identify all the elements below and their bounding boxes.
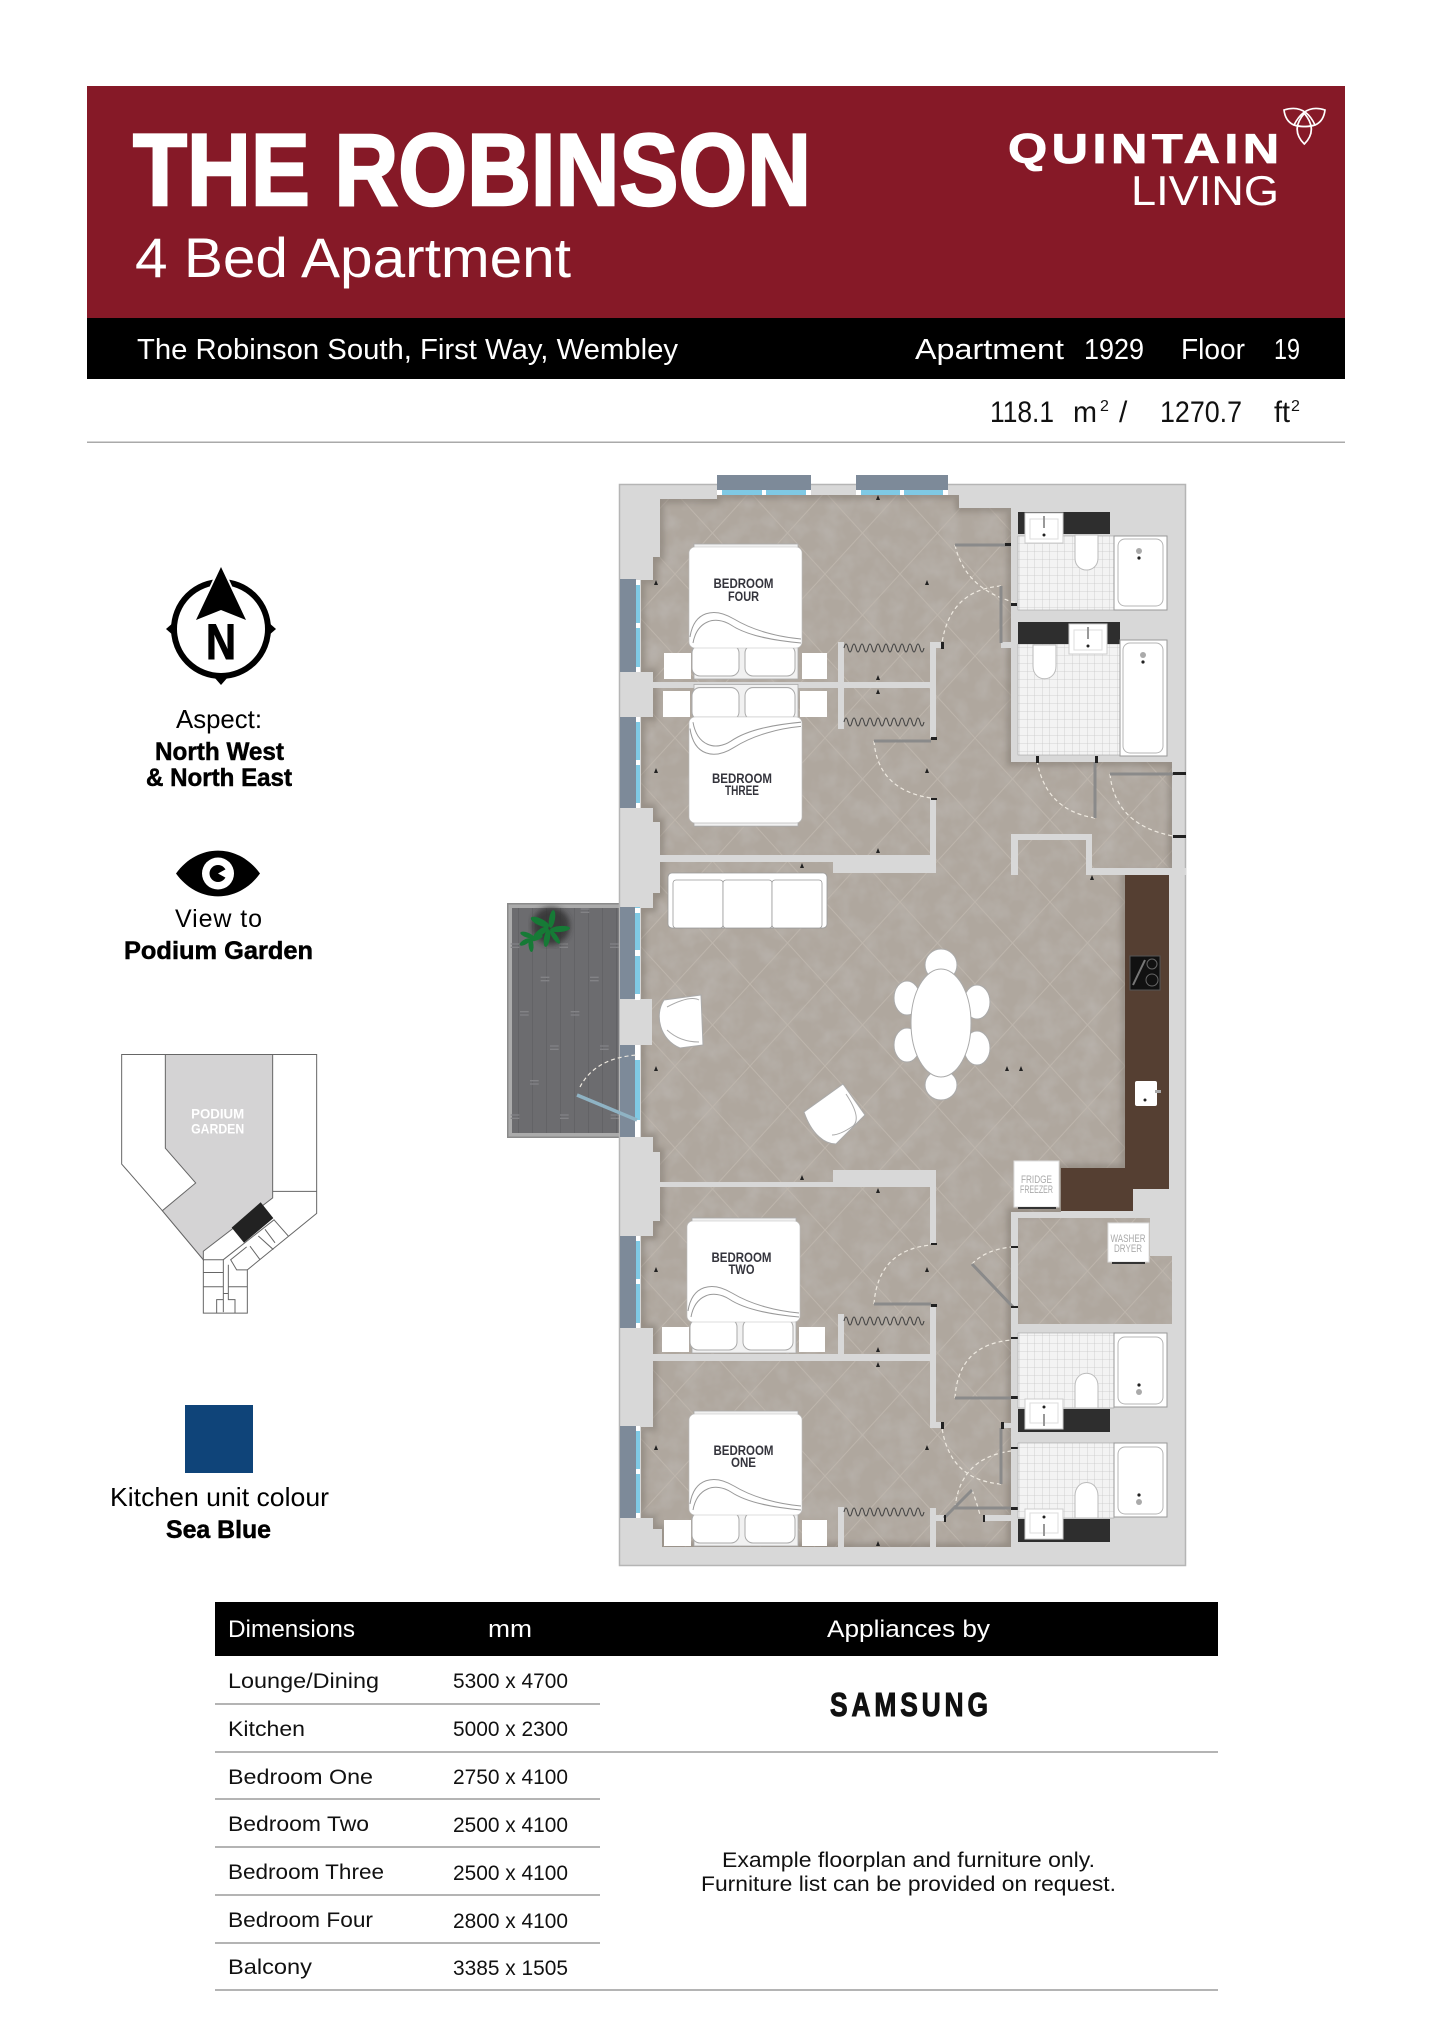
balcony xyxy=(507,903,620,1138)
table header: mm xyxy=(488,1616,532,1643)
wardrobes rails xyxy=(844,644,924,1516)
table header xyxy=(215,1602,1218,1656)
bedroom four: BEDROOM xyxy=(714,576,774,591)
key plan: GARDEN xyxy=(191,1122,244,1137)
logo: Quintain Living: QUINTAIN xyxy=(1008,125,1279,172)
table rows: Bedroom One xyxy=(228,1766,373,1789)
area figures: 2 xyxy=(1291,398,1300,415)
kitchen sink xyxy=(1135,1081,1161,1106)
view text: Podium Garden xyxy=(124,937,313,965)
area figures: m xyxy=(1073,396,1097,429)
bathroom upper two xyxy=(1018,622,1167,756)
kitchen colour swatch xyxy=(185,1405,253,1473)
table rows: 5000 x 2300 xyxy=(453,1718,568,1741)
bathroom lower one xyxy=(1018,1333,1167,1432)
aspect text: North West xyxy=(155,738,285,766)
table header: Dimensions xyxy=(228,1616,355,1643)
table header: Appliances by xyxy=(827,1616,990,1643)
address: The Robinson South, First Way, Wembley xyxy=(137,334,678,366)
bedroom three: THREE xyxy=(725,783,759,798)
table rows: Bedroom Four xyxy=(228,1909,373,1932)
table rows: 2750 x 4100 xyxy=(453,1766,568,1789)
bedroom one xyxy=(664,1411,827,1546)
table rows: Lounge/Dining xyxy=(228,1670,379,1693)
area figures: / xyxy=(1119,396,1128,429)
disclaimer xyxy=(701,1849,1116,1896)
washer dryer: DRYER xyxy=(1114,1243,1142,1255)
disclaimer: Furniture list can be provided on request. xyxy=(701,1873,1116,1896)
bathroom upper one xyxy=(1018,512,1167,610)
bedroom two: TWO xyxy=(728,1262,754,1277)
fridge freezer xyxy=(1014,1161,1059,1209)
plant xyxy=(519,907,570,952)
aspect text: & North East xyxy=(146,764,293,792)
table rows: Bedroom Two xyxy=(228,1813,369,1836)
bedroom three xyxy=(663,684,827,826)
table rows: Kitchen xyxy=(228,1718,305,1741)
dimension markers xyxy=(654,495,1094,1546)
area figures xyxy=(990,396,1300,429)
fridge freezer: FRIDGE xyxy=(1021,1174,1052,1186)
bedroom one: ONE xyxy=(731,1455,756,1470)
disclaimer: Example floorplan and furniture only. xyxy=(722,1849,1095,1872)
area figures: ft xyxy=(1274,396,1291,429)
key plan xyxy=(122,1055,317,1313)
icon: compass xyxy=(166,562,276,685)
bedroom one: BEDROOM xyxy=(714,1443,774,1458)
armchair angled xyxy=(804,1084,865,1144)
kitchen colour text: Sea Blue xyxy=(166,1516,271,1544)
windows xyxy=(620,475,948,1518)
table rows: Balcony xyxy=(228,1956,313,1979)
logo: Samsung: SAMSUNG xyxy=(830,1687,988,1724)
washer dryer: WASHER xyxy=(1110,1233,1146,1245)
aspect text xyxy=(146,704,293,792)
kitchen colour text: Kitchen unit colour xyxy=(110,1482,329,1512)
view text xyxy=(124,905,313,965)
area figures: 2 xyxy=(1100,398,1109,415)
kitchen counter xyxy=(1061,875,1169,1211)
logo: Quintain Living xyxy=(1008,108,1325,214)
header panel xyxy=(87,86,1345,318)
armchair left xyxy=(659,995,703,1048)
apartment and floor numbers: 1929 xyxy=(1084,334,1144,366)
table rows xyxy=(215,1670,1218,1990)
table rows: Bedroom Three xyxy=(228,1861,384,1884)
area figures: 1270.7 xyxy=(1160,396,1242,429)
bathroom lower two xyxy=(1018,1443,1167,1542)
table rows: 5300 x 4700 xyxy=(453,1670,568,1693)
bedroom three: BEDROOM xyxy=(712,771,772,786)
doors xyxy=(577,543,1186,1522)
aspect text: Aspect: xyxy=(176,704,262,734)
address bar xyxy=(87,318,1345,379)
dimensions table xyxy=(215,1602,1218,1990)
sofa xyxy=(668,873,827,928)
area figures: 118.1 xyxy=(990,396,1054,429)
view text: View to xyxy=(175,905,262,933)
outer walls xyxy=(620,484,1186,1566)
floor xyxy=(620,484,1186,1566)
hob xyxy=(1130,956,1160,990)
bedroom four: FOUR xyxy=(728,589,759,604)
apartment and floor numbers: Apartment xyxy=(915,334,1064,366)
apartment and floor numbers: Floor xyxy=(1181,334,1245,366)
apartment and floor numbers: 19 xyxy=(1274,334,1300,366)
table rows: 2500 x 4100 xyxy=(453,1862,568,1885)
subtitle: 4 Bed Apartment xyxy=(135,226,571,289)
bedroom two: BEDROOM xyxy=(712,1250,772,1265)
bedroom four xyxy=(664,544,827,679)
bedroom two xyxy=(662,1218,825,1353)
title: THE ROBINSON xyxy=(133,113,811,227)
table rows: 2500 x 4100 xyxy=(453,1814,568,1837)
interior walls xyxy=(620,642,1186,1547)
logo: Quintain Living: LIVING xyxy=(1131,167,1279,214)
table rows: 2800 x 4100 xyxy=(453,1910,568,1933)
apartment and floor numbers xyxy=(915,334,1300,366)
table rows: 3385 x 1505 xyxy=(453,1957,568,1980)
dining table and chairs xyxy=(894,949,990,1100)
icon: eye xyxy=(176,851,260,896)
fridge freezer: FREEZER xyxy=(1020,1184,1053,1196)
washer dryer xyxy=(1108,1223,1149,1264)
icon: compass: N xyxy=(206,614,236,670)
kitchen colour text xyxy=(110,1482,329,1544)
floor plan xyxy=(507,475,1186,1566)
key plan: PODIUM xyxy=(191,1106,244,1121)
